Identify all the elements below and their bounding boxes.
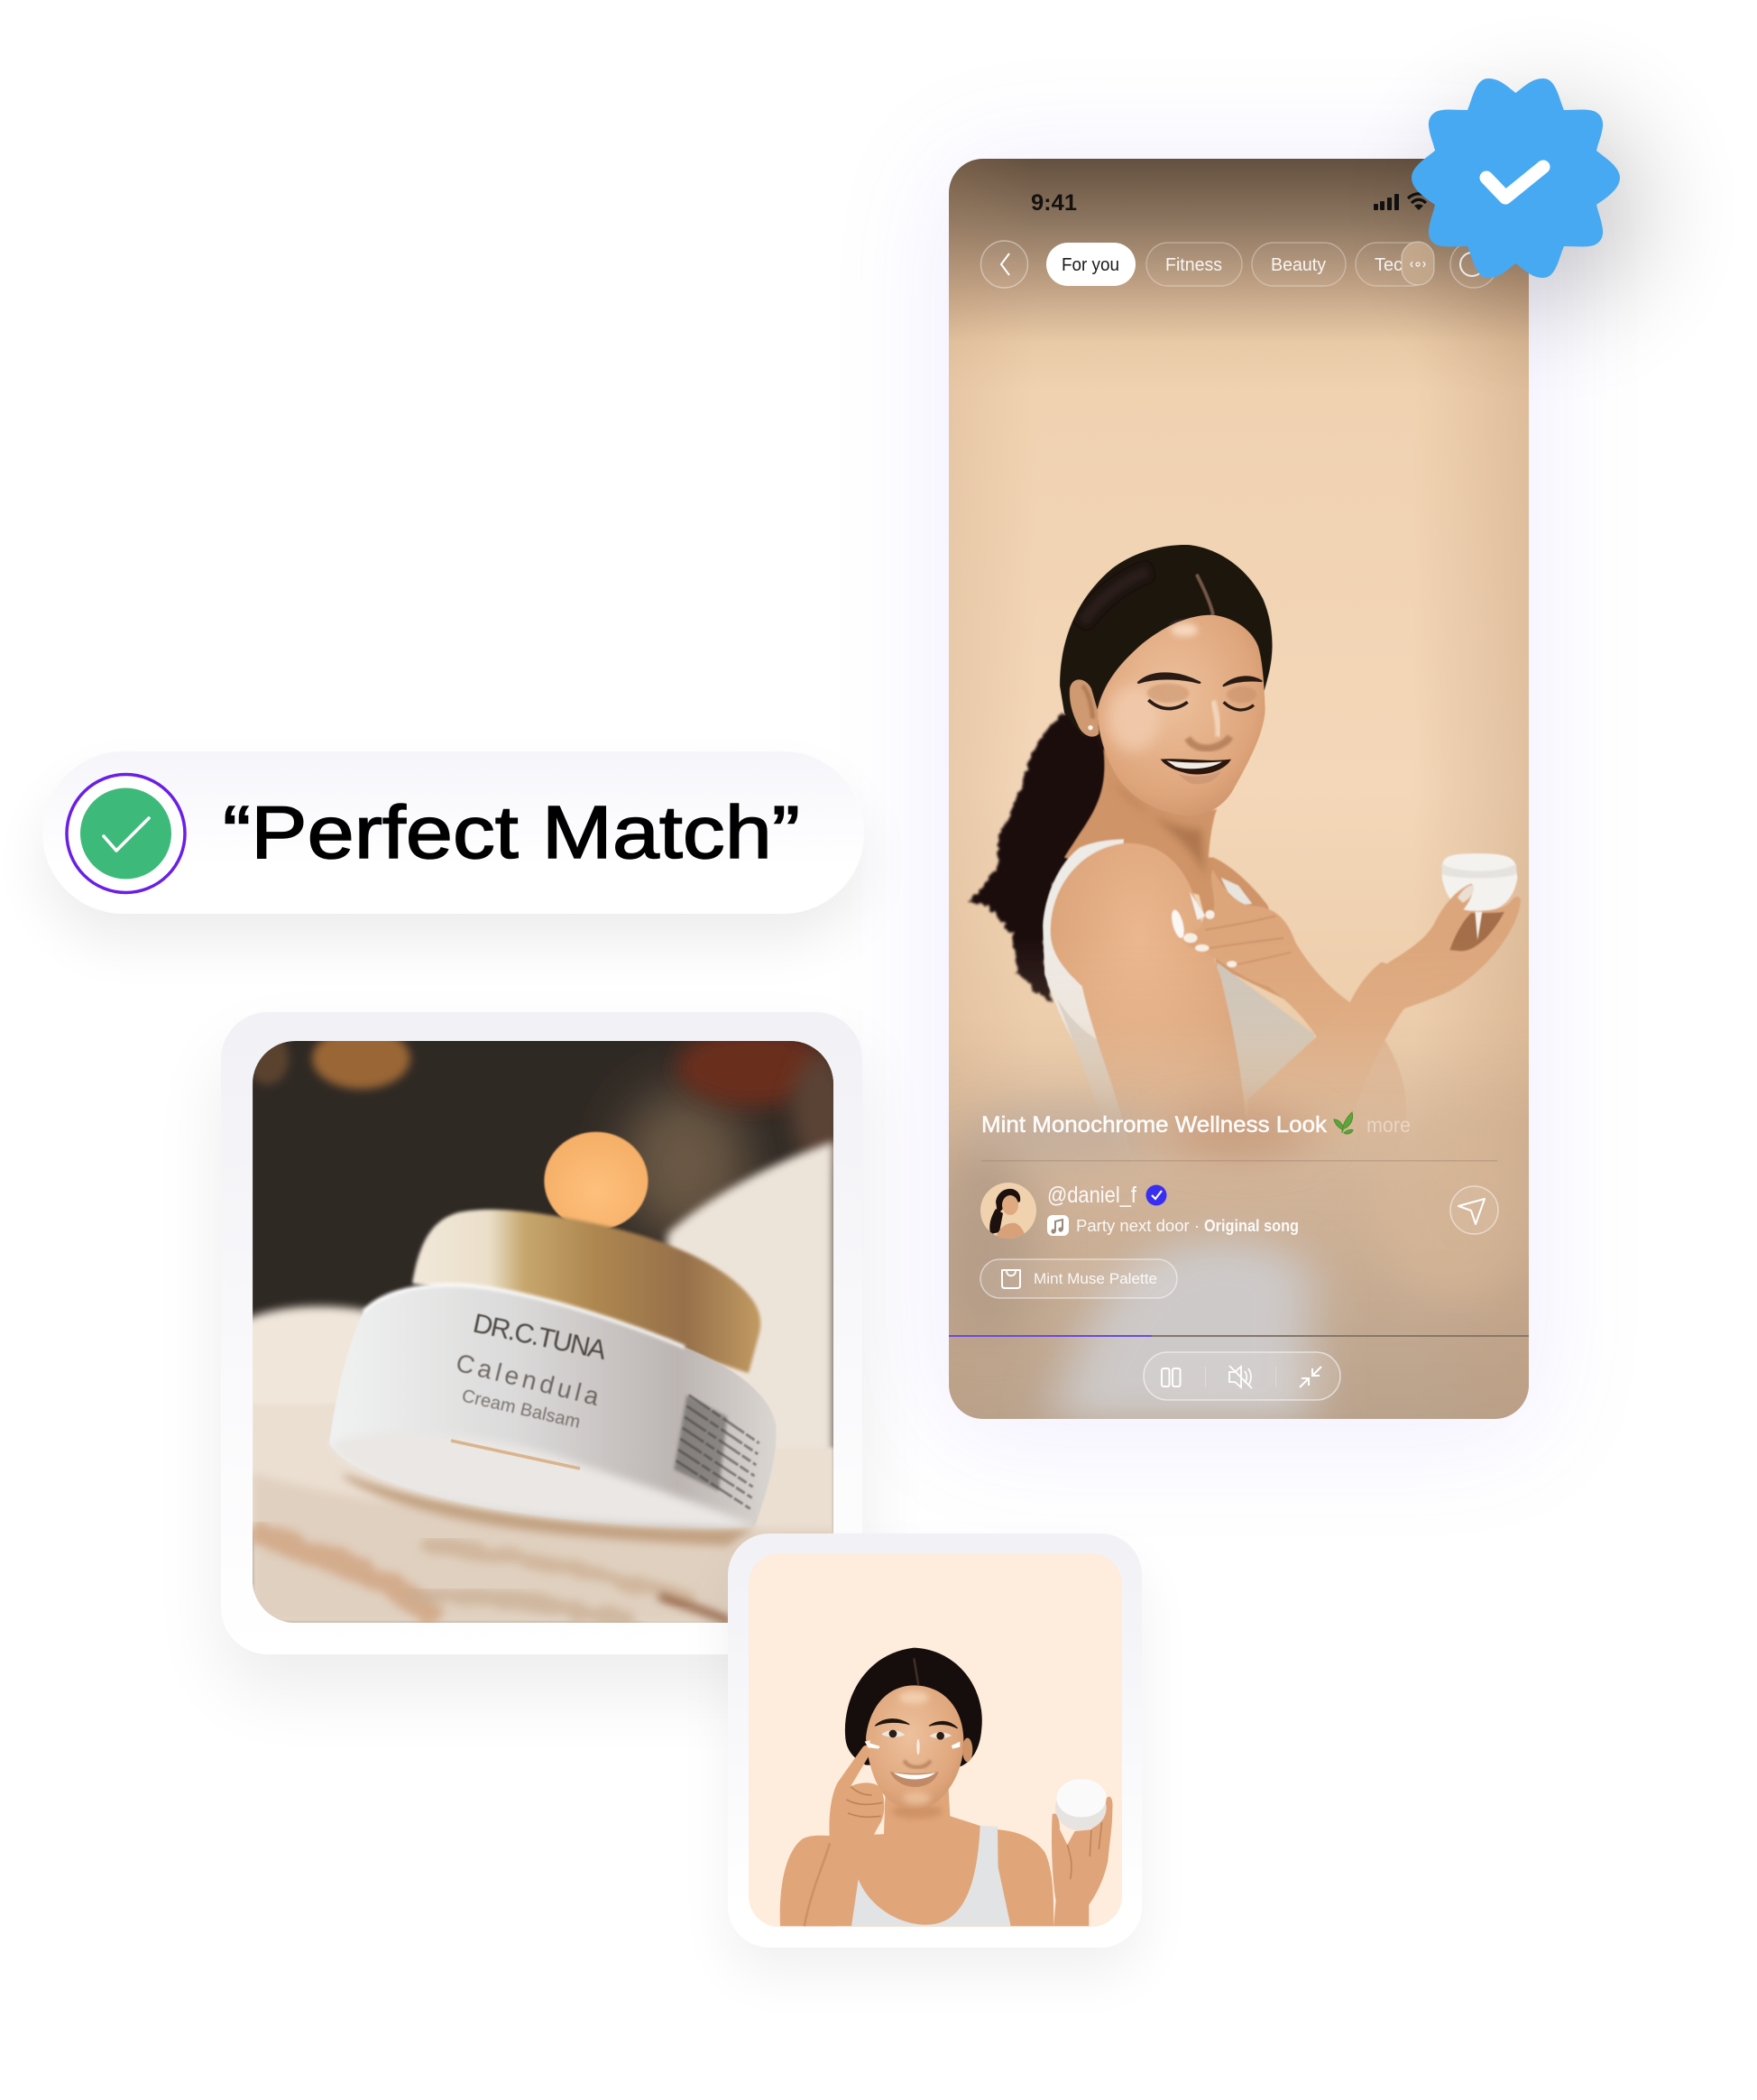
status bar	[1031, 190, 1430, 216]
button: share	[1450, 1186, 1498, 1234]
jar label text: Calendula	[454, 1349, 603, 1411]
caption: more	[1366, 1113, 1411, 1137]
song line: Original song	[1204, 1217, 1299, 1235]
jar label text	[454, 1309, 609, 1432]
jar label text: Cream Balsam	[460, 1386, 582, 1432]
avatar	[980, 1183, 1036, 1239]
panel: Perfect Match pill	[42, 751, 864, 914]
chip: Tech: Tec	[1375, 255, 1403, 275]
jar label text: DR.C.TUNA	[471, 1309, 609, 1366]
head: hair and face	[1060, 545, 1273, 816]
chip: For you: For you	[1062, 255, 1119, 275]
product pill	[980, 1259, 1177, 1298]
chip: Tech	[1356, 243, 1432, 286]
badge: blue verified seal	[1412, 72, 1679, 345]
chip: Beauty: Beauty	[1271, 255, 1326, 275]
username: @daniel_f	[1047, 1183, 1136, 1208]
chip: Beauty	[1252, 243, 1346, 286]
song line: Party next door ·	[1076, 1217, 1200, 1235]
panel: product photo card	[221, 1012, 862, 1654]
video controls	[1144, 1352, 1340, 1400]
photo: cream jar	[253, 1041, 833, 1623]
bottom glass blur	[938, 1019, 1534, 1423]
photo: woman with jar	[749, 1553, 1122, 1927]
icon: green check in purple ring	[67, 774, 185, 893]
chip: For you	[1046, 243, 1136, 286]
heading: Perfect Match: “Perfect Match”	[223, 790, 800, 874]
icon: scroll handle	[1402, 242, 1434, 285]
panel: model photo card	[728, 1534, 1142, 1948]
product pill: Mint Muse Palette	[1034, 1270, 1157, 1287]
status bar: 9:41	[1031, 190, 1077, 216]
chip: Fitness: Fitness	[1165, 255, 1222, 275]
song line	[1047, 1215, 1299, 1236]
button: back	[981, 241, 1028, 288]
photo: woman applying cream	[969, 545, 1521, 1155]
caption: Mint Monochrome Wellness Look	[981, 1112, 1328, 1138]
progress bar	[949, 1335, 1529, 1337]
button: search	[1450, 241, 1497, 288]
panel: phone screen	[949, 159, 1529, 1419]
chip: Fitness	[1146, 243, 1242, 286]
